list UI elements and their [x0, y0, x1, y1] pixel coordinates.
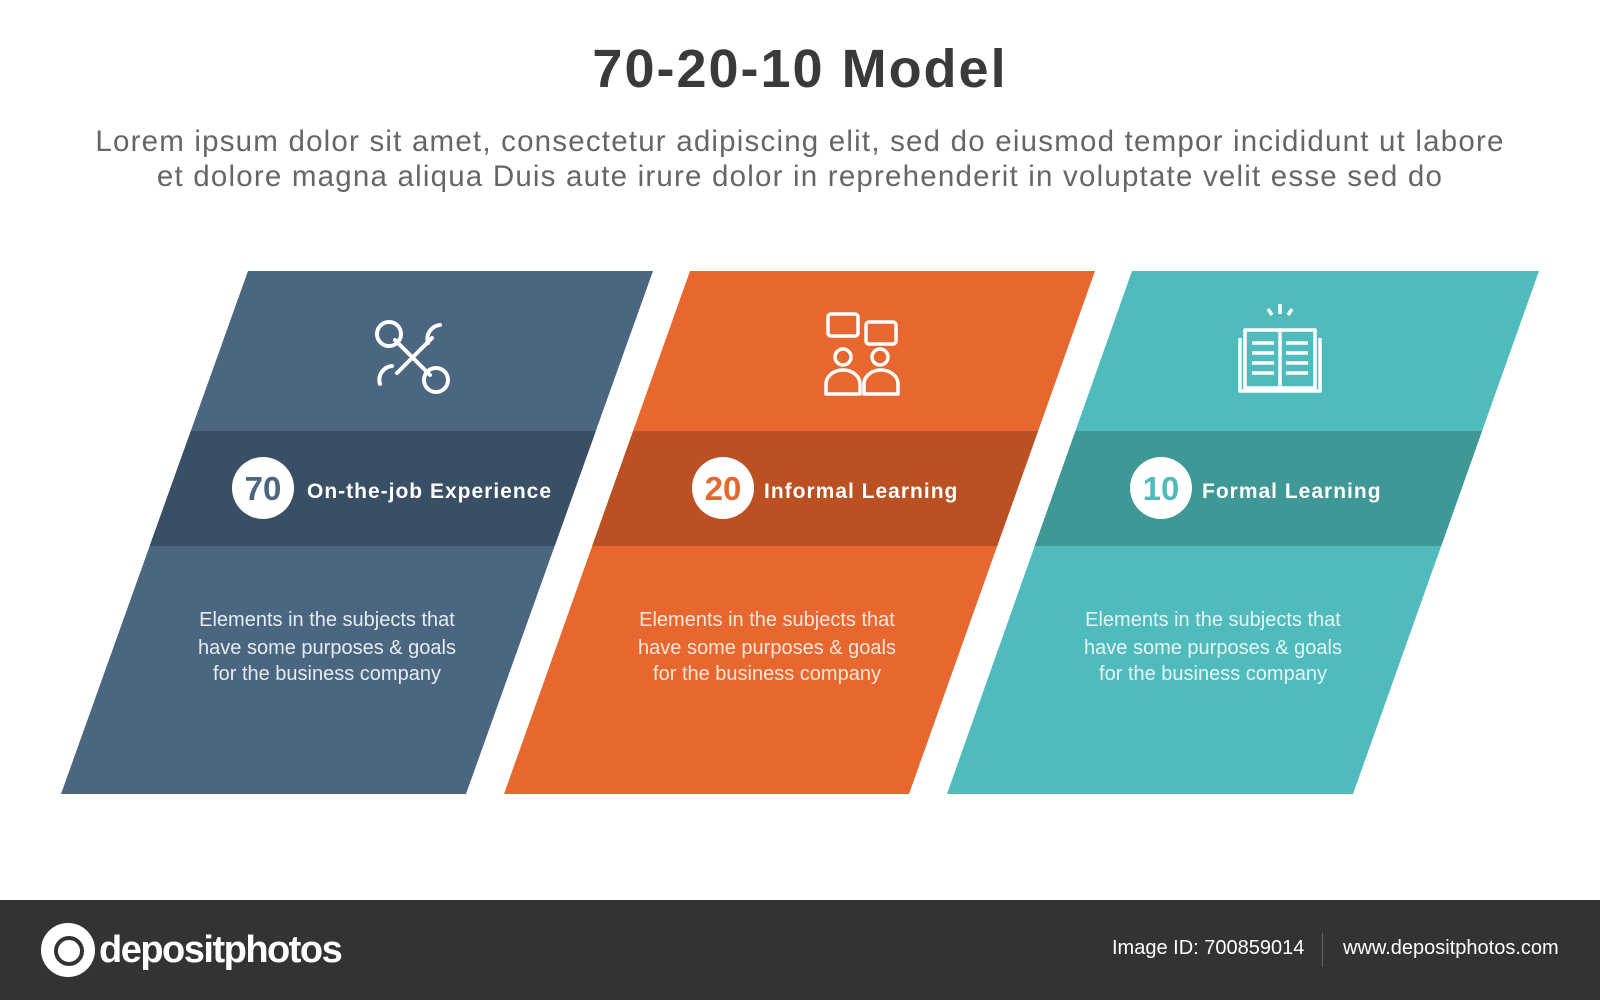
footer: www.depositphotos.com: [1343, 937, 1559, 959]
panel: informal: for the business company: [653, 663, 881, 685]
panel: on-the-job: On-the-job Experience: [307, 480, 552, 503]
subtitle: [95, 125, 1505, 193]
panel: on-the-job: Elements in the subjects that: [199, 609, 455, 631]
panel: formal: 10: [1143, 470, 1179, 507]
icon: wrenches: [377, 322, 448, 392]
subtitle: et dolore magna aliqua Duis aute irure dolor in reprehenderit in voluptate velit esse sed do: [157, 160, 1443, 193]
panel: informal: have some purposes & goals: [638, 637, 896, 659]
image id: Image ID: 700859014: [1112, 937, 1304, 959]
logo: depositphotos: [99, 928, 341, 970]
panel: informal: Elements in the subjects that: [639, 609, 895, 631]
panel: formal: Formal Learning: [1202, 480, 1382, 503]
icon: chat people: [826, 314, 898, 394]
panel: formal: for the business company: [1099, 663, 1327, 685]
panel: on-the-job: have some purposes & goals: [198, 637, 456, 659]
panel: informal: [504, 271, 1095, 794]
panel: on-the-job: for the business company: [213, 663, 441, 685]
icon: book: [1240, 304, 1320, 391]
panel: informal: Informal Learning: [764, 480, 958, 503]
title: 70-20-10 Model: [592, 39, 1008, 99]
diagram: [61, 271, 1539, 794]
panel: informal: 20: [705, 470, 741, 507]
panel: formal: Elements in the subjects that: [1085, 609, 1341, 631]
badge 70: [232, 457, 294, 519]
panel: on-the-job: 70: [245, 470, 281, 507]
subtitle: Lorem ipsum dolor sit amet, consectetur adipiscing elit, sed do eiusmod tempor incididunt ut labore: [95, 125, 1505, 158]
logo: [41, 923, 342, 977]
panel: formal: [947, 271, 1539, 794]
panel: on-the-job: [61, 271, 653, 794]
footer: [0, 900, 1600, 1000]
panel: formal: have some purposes & goals: [1084, 637, 1342, 659]
